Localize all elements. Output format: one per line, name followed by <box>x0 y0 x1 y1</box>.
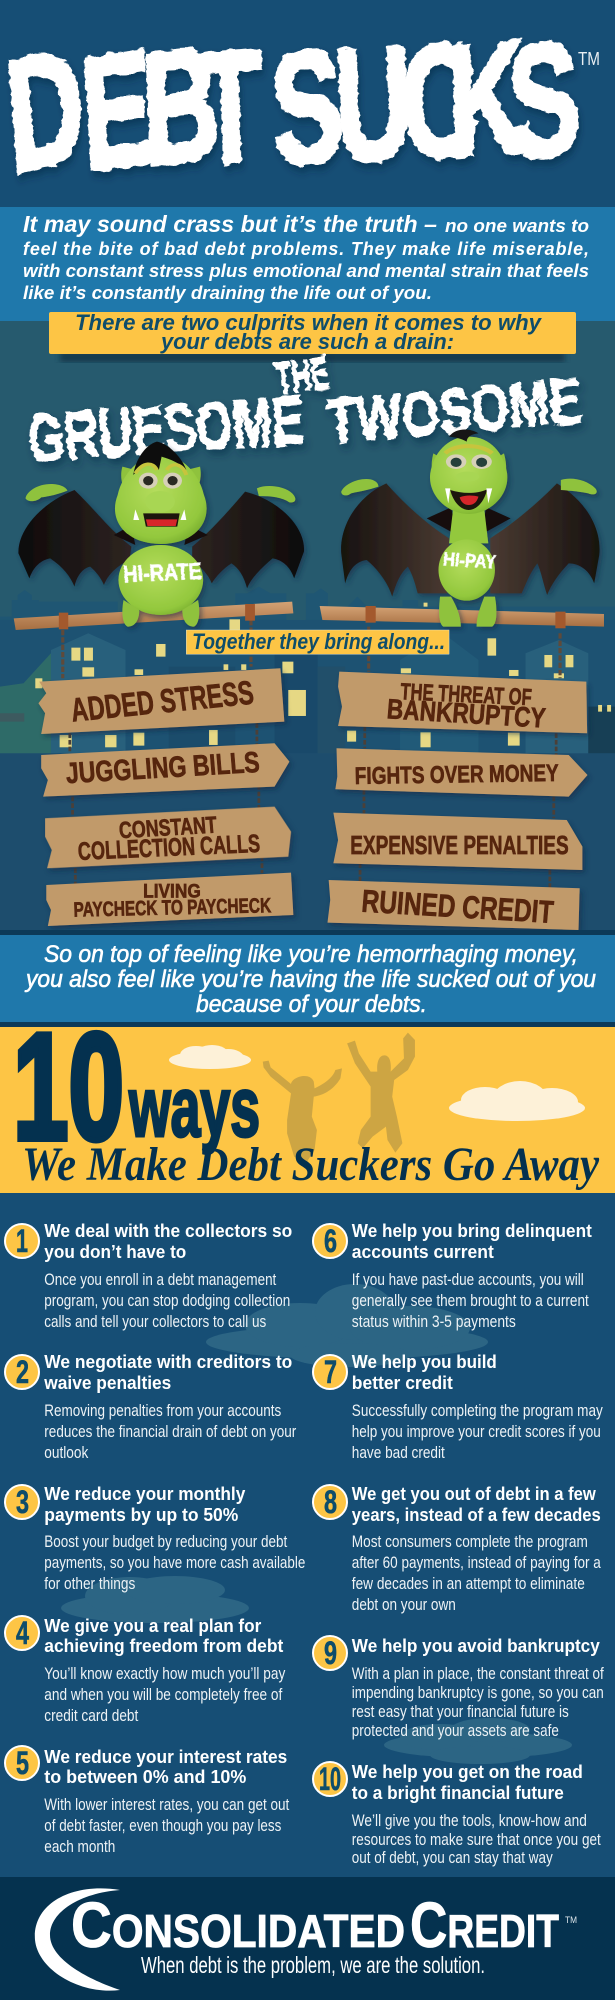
sign: added stress <box>38 668 284 734</box>
sign: threat of bankruptcy: THE THREAT OF <box>400 679 532 711</box>
item 6: We help you bring delinquent <box>352 1221 592 1241</box>
panel: hemorrhaging money statement: because of your debts. <box>196 991 427 1018</box>
sign: ruined credit <box>327 880 580 930</box>
item 2: 2 <box>16 1354 29 1390</box>
item 3: for other things <box>44 1574 135 1593</box>
sign: added stress: ADDED STRESS <box>68 673 256 729</box>
logo wordmark: TM <box>565 1915 577 1925</box>
item 6: accounts current <box>352 1242 494 1262</box>
tagline: When debt is the problem, we are the solution. <box>141 1952 485 1978</box>
item 2: We negotiate with creditors to <box>44 1352 292 1372</box>
item 8: 8 <box>324 1484 337 1520</box>
item 5: With lower interest rates, you can get out <box>44 1795 290 1814</box>
intro paragraph: feel the bite of bad debt problems. They make life miserable, <box>23 239 589 259</box>
panel: characters and signs <box>14 430 604 930</box>
panel: ten ways list <box>0 1193 615 1877</box>
heading: The Gruesome Twosome: GRUESOME <box>25 382 306 477</box>
item 5: We reduce your interest rates <box>44 1747 287 1767</box>
sign: threat of bankruptcy <box>338 672 587 734</box>
panel: 10 ways heading <box>0 1002 615 1193</box>
sign: constant collection calls <box>45 807 291 868</box>
item 7 <box>313 1352 603 1462</box>
sign: expensive penalties <box>333 813 582 870</box>
item 10: We help you get on the road <box>352 1762 583 1782</box>
heading: The Gruesome Twosome <box>25 346 584 477</box>
item 1: program, you can stop dodging collection <box>44 1291 290 1310</box>
sign: juggling bills: JUGGLING BILLS <box>64 745 261 790</box>
item 8: We get you out of debt in a few <box>352 1484 597 1504</box>
item 1: We deal with the collectors so <box>44 1221 292 1241</box>
logo wordmark: CONSOLIDATED <box>71 1889 405 1961</box>
panel: hemorrhaging money statement <box>0 930 615 1027</box>
item 5: 5 <box>16 1745 29 1781</box>
intro paragraph: like it’s constantly draining the life out of you. <box>23 283 432 303</box>
callout: two culprits: your debts are such a drain: <box>160 329 454 354</box>
logo wordmark: CREDIT <box>410 1889 559 1961</box>
item 6: 6 <box>324 1223 337 1259</box>
item 9: 9 <box>324 1635 337 1671</box>
cloud: lower right <box>384 1718 572 1764</box>
sign: juggling bills <box>41 743 289 797</box>
cloud: large <box>449 1081 585 1121</box>
item 4 <box>5 1615 286 1725</box>
item 1: 1 <box>16 1223 28 1259</box>
item 7: 7 <box>324 1354 337 1390</box>
intro paragraph <box>23 211 589 303</box>
item 10: 10 <box>319 1761 341 1797</box>
callout: together they bring along: Together they bring along... <box>192 630 445 654</box>
big number 10: 10 <box>13 1002 124 1172</box>
sign: constant collection calls: CONSTANT <box>118 812 218 844</box>
item 3: 3 <box>16 1484 29 1520</box>
item 10 <box>313 1761 601 1867</box>
item 4: and when you will be completely free of <box>44 1685 283 1704</box>
item 1: Once you enroll in a debt management <box>44 1270 277 1289</box>
character: Hi-Rate <box>18 442 304 627</box>
panel: hemorrhaging money statement: So on top of feeling like you’re hemorrhaging money, <box>44 941 578 968</box>
item 10: out of debt, you can stay that way <box>352 1848 553 1867</box>
item 8 <box>313 1484 601 1614</box>
item 9: protected and your assets are safe <box>352 1721 559 1740</box>
heading: The Gruesome Twosome: THE <box>272 346 332 405</box>
item 3 <box>5 1484 305 1593</box>
item 1: calls and tell your collectors to call us <box>44 1312 266 1331</box>
intro paragraph: no one wants to <box>445 216 589 236</box>
sign: living paycheck to paycheck: LIVING <box>143 881 201 902</box>
sign: living paycheck to paycheck <box>46 873 293 926</box>
item 4: We give you a real plan for <box>44 1616 261 1636</box>
item 8: debt on your own <box>352 1595 456 1614</box>
windows <box>35 603 611 747</box>
item 2: reduces the financial drain of debt on your <box>44 1422 297 1441</box>
item 4: achieving freedom from debt <box>44 1636 283 1656</box>
intro paragraph: with constant stress plus emotional and mental strain that feels <box>23 261 589 281</box>
item 5: of debt faster, even though you pay less <box>44 1816 281 1835</box>
item 1 <box>5 1221 292 1331</box>
item 6: status within 3-5 payments <box>352 1312 516 1331</box>
label: Hi-Pay: HI-PAY <box>442 550 497 573</box>
title: Debt Sucks: DEBT SUCKS <box>0 6 584 206</box>
item 8: years, instead of a few decades <box>352 1505 601 1525</box>
trademark: TM <box>578 49 600 69</box>
item 5: each month <box>44 1837 115 1856</box>
perch: right <box>320 606 604 678</box>
callout: two culprits <box>49 310 576 362</box>
character: Hi-Pay <box>341 430 600 627</box>
cloud: upper <box>206 1284 488 1367</box>
item 2: Removing penalties from your accounts <box>44 1401 281 1420</box>
perch: left <box>14 602 293 678</box>
sign: living paycheck to paycheck: PAYCHECK TO PAYCHECK <box>73 894 272 921</box>
panel: intro text <box>0 207 615 321</box>
item 7: We help you build <box>352 1352 497 1372</box>
item 2 <box>5 1352 297 1462</box>
item 6 <box>313 1221 592 1331</box>
item 7: have bad credit <box>352 1443 445 1462</box>
item 10: to a bright financial future <box>352 1783 564 1803</box>
item 2: waive penalties <box>43 1373 171 1393</box>
item 3: payments, so you have more cash available <box>44 1553 305 1572</box>
intro paragraph: It may sound crass but it’s the truth – <box>23 211 437 237</box>
item 4: 4 <box>16 1615 29 1651</box>
item 3: payments by up to 50% <box>44 1505 238 1525</box>
sign: fights over money <box>335 748 588 797</box>
callout: two culprits: There are two culprits when it comes to why <box>75 310 543 335</box>
item 1: you don’t have to <box>44 1242 186 1262</box>
cloud: lower left <box>61 1576 249 1623</box>
panel: header <box>0 0 615 207</box>
item 2: outlook <box>44 1443 89 1462</box>
word: ways: ways <box>128 1060 260 1154</box>
panel: footer logo <box>0 1877 615 2000</box>
panel: hemorrhaging money statement: you also feel like you’re having the life sucked out of you <box>24 966 596 993</box>
panel: gruesome twosome background <box>0 321 615 935</box>
cloud: small <box>169 1045 251 1069</box>
item 7: better credit <box>352 1373 453 1393</box>
label: Hi-Rate: HI-RATE <box>123 560 203 588</box>
item 3: Boost your budget by reducing your debt <box>44 1532 288 1551</box>
item 5: to between 0% and 10% <box>44 1767 246 1787</box>
chains between signs <box>70 723 556 888</box>
item 4: credit card debt <box>44 1706 139 1725</box>
silhouettes: jumping people <box>263 1033 415 1163</box>
item 5 <box>5 1745 290 1856</box>
town silhouette <box>0 587 615 753</box>
sign: constant collection calls: COLLECTION CALLS <box>77 829 261 865</box>
logo crescent <box>35 1888 120 1991</box>
item 3: We reduce your monthly <box>44 1484 245 1504</box>
sign: threat of bankruptcy: BANKRUPTCY <box>386 694 547 734</box>
item 4: You’ll know exactly how much you’ll pay <box>44 1664 286 1683</box>
item 9 <box>313 1635 604 1740</box>
item 9: We help you avoid bankruptcy <box>352 1636 600 1656</box>
